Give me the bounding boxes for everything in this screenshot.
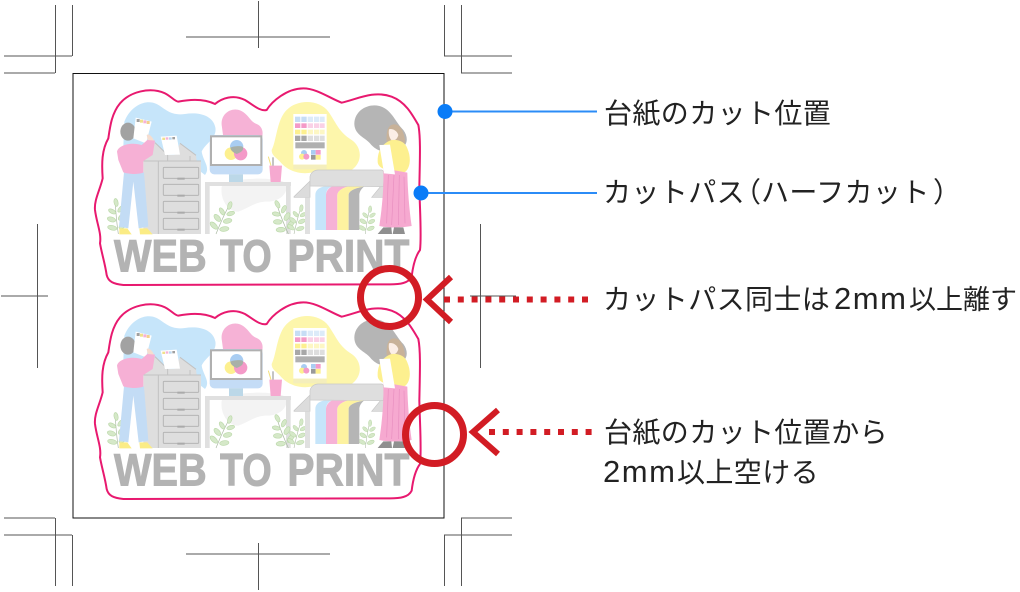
callout: cut path: カットパス [603,177,745,208]
callout: gap from sheet edge: 2mm [603,454,676,489]
callout: sheet cut position [438,98,831,129]
callout: cut path: （ [733,177,761,208]
illustration: bottom [101,316,412,453]
crop marks [1,1,516,590]
callout: gap between cut paths: 2mm [834,281,907,316]
logo text: bottom: PRINT [287,445,410,496]
callout: cut path: ハーフカット [761,177,930,208]
illustration: top [101,102,412,239]
callout: gap between cut paths [360,268,1017,326]
callout: gap from sheet edge: 台紙のカット位置から [604,417,888,448]
logo text: bottom [114,445,410,496]
logo text: bottom: WEB [114,445,207,496]
logo text: top: WEB [114,231,207,282]
logo text: top [114,231,410,282]
sticker: bottom [95,302,421,499]
callout: sheet cut position: 台紙のカット位置 [604,98,831,129]
callout: gap between cut paths: 以上離す [909,285,1017,315]
callout: cut path: ） [933,177,961,208]
sheet cut frame [73,74,444,518]
logo text: bottom: TO [220,445,272,496]
logo text: top: PRINT [287,231,410,282]
logo text: top: TO [220,231,272,282]
callout: gap from sheet edge [406,406,888,489]
cut path: top [95,88,421,285]
callout: gap between cut paths: カットパス同士は [603,284,830,315]
cut path: bottom [95,302,421,499]
callout: gap from sheet edge: 以上空ける [677,457,819,488]
callout: cut path [414,177,961,208]
sticker: top [95,88,421,285]
